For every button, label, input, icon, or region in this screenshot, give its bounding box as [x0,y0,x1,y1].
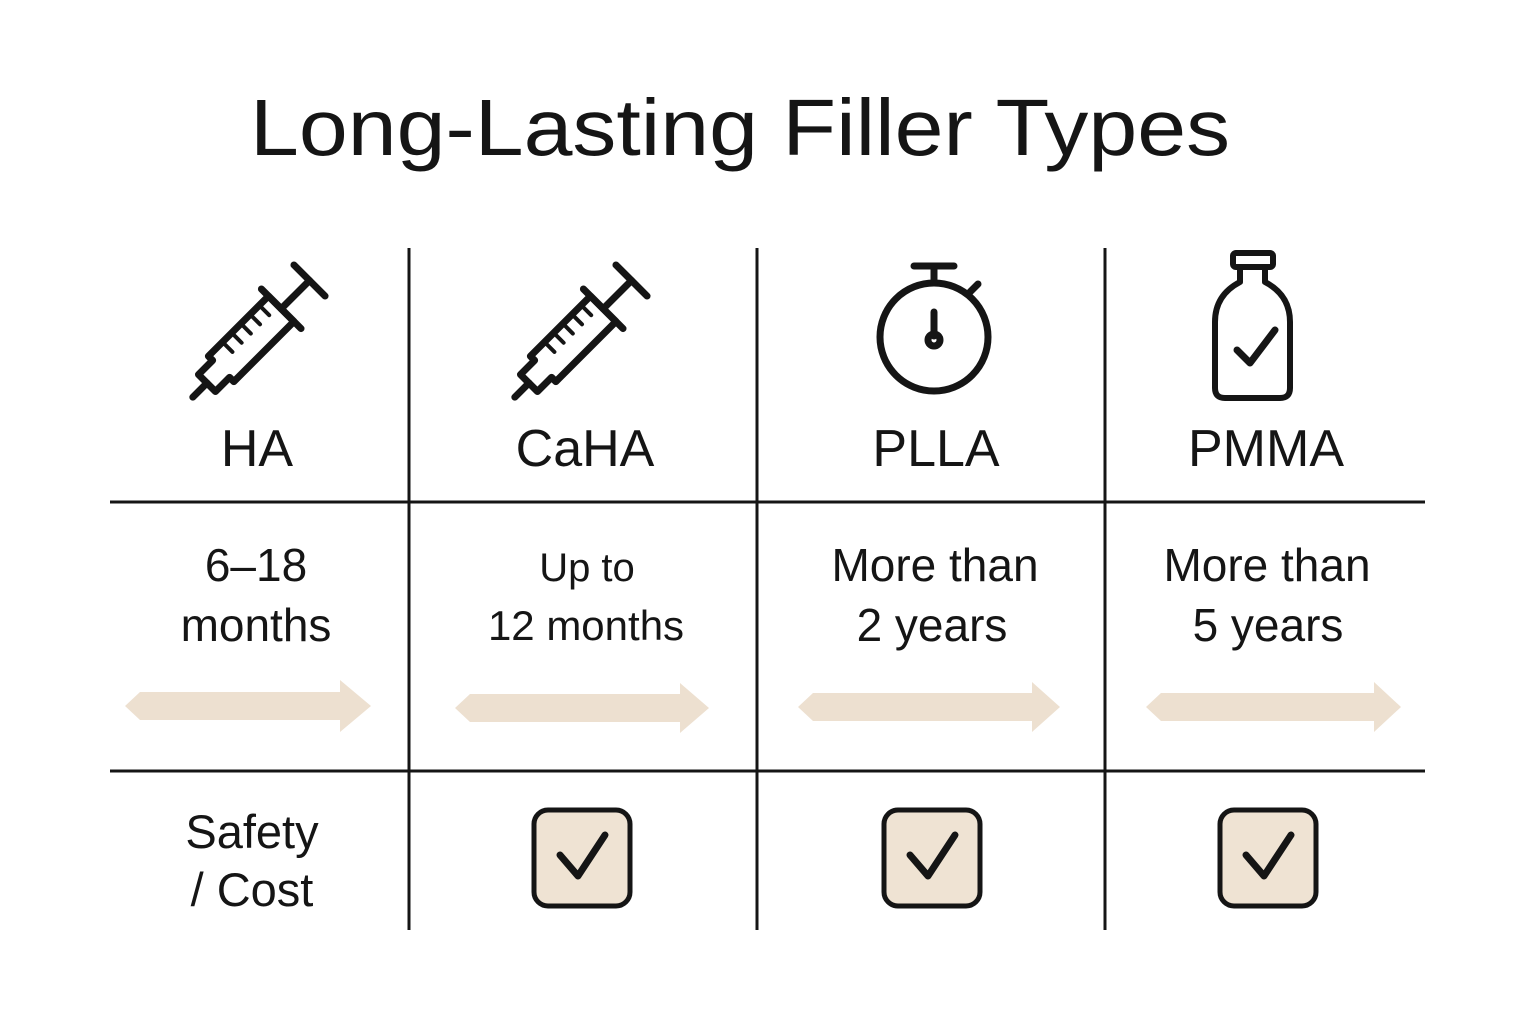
durations: More than [1163,539,1371,591]
text: PMMA [1188,420,1344,478]
durations: 6–18 [205,539,307,591]
text: PLLA [872,420,1000,478]
checkboxes [534,810,1316,906]
icon: stopwatch [880,266,988,391]
durations: 2 years [857,599,1007,651]
icon: bottle with check [1215,253,1290,398]
durations: 5 years [1193,599,1343,651]
arrows [125,680,1401,733]
durations: Up to [539,546,635,590]
durations [181,539,1371,651]
icon: syringe HA [173,261,329,417]
text: CaHA [516,420,655,478]
durations: months [181,599,331,651]
durations: 12 months [488,602,684,649]
safety/cost: Safety [185,805,319,858]
labels: HA [221,420,293,478]
title: Long-Lasting Filler Types [250,83,1230,172]
icon: syringe CaHA [495,261,651,417]
text: / Cost [191,863,313,916]
durations: More than [831,539,1039,591]
